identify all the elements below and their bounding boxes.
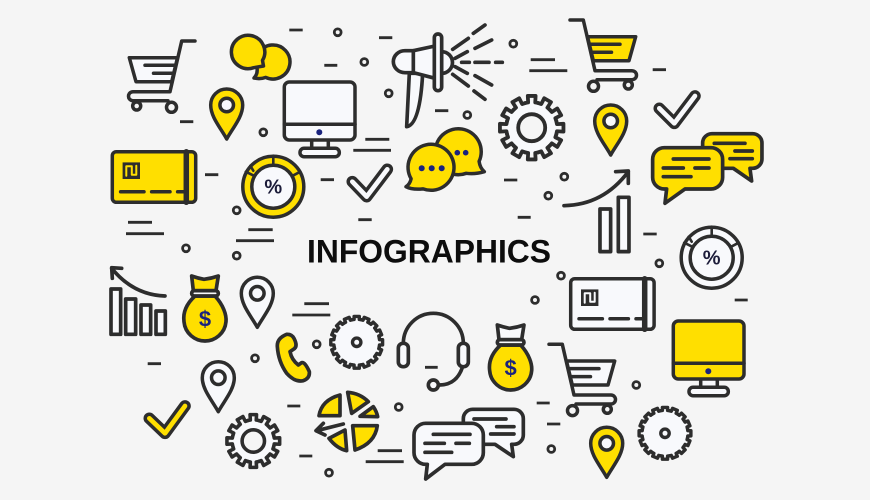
icon: white check mark, top right — [659, 96, 695, 123]
icon: shopping cart with yellow basket, top right — [570, 20, 636, 91]
icon: yellow location pin, top right — [595, 105, 627, 155]
icon: yellow money bag — [184, 276, 226, 341]
icon: yellow telephone handset — [277, 334, 309, 381]
icon: shopping cart, top left — [128, 41, 195, 112]
dollar sign: $ — [505, 356, 517, 381]
icon: yellow round chat bubbles with dots — [406, 129, 484, 190]
icon: yellow location pin, top left — [211, 89, 243, 139]
percent label: % — [264, 176, 282, 198]
icon: white shopping cart, lower right — [549, 344, 616, 416]
icon: yellow round speech bubbles, top left — [231, 35, 290, 79]
decorative dashes — [126, 30, 748, 462]
icon: white check mark — [352, 169, 387, 197]
icon: white desktop monitor — [284, 82, 355, 157]
icon: yellow desktop monitor — [673, 321, 744, 396]
icon: yellow rectangular chat bubbles — [653, 134, 762, 203]
icon: white credit card — [571, 279, 654, 329]
icon: rising arrow over bar chart — [564, 171, 629, 252]
icon: yellow location pin, bottom — [591, 427, 623, 477]
icon: white rectangular chat bubbles — [414, 409, 523, 479]
icon: yellow credit card — [112, 152, 196, 202]
dollar sign: $ — [199, 307, 211, 332]
decorative ring dots — [183, 29, 663, 476]
icon: white location pin, centre left — [241, 277, 273, 327]
icon: megaphone with sound rays — [393, 25, 502, 127]
icon: money bag with white top — [489, 325, 532, 390]
icon: headset with microphone — [398, 313, 468, 390]
icon: saw-tooth gear, lower right — [639, 407, 691, 459]
icon: yellow percent donut — [243, 156, 304, 217]
percent label: % — [703, 248, 721, 270]
icon: falling arrow over bar chart — [111, 268, 165, 334]
icon: small gear, lower left — [227, 415, 280, 467]
icon: white percent donut — [681, 227, 742, 288]
icon: large gear — [500, 96, 563, 159]
icon: pie chart with arrow — [316, 392, 378, 451]
icon: yellow check mark — [149, 406, 185, 433]
title: INFOGRAPHICS — [307, 234, 551, 270]
icon: saw-tooth gear, centre — [331, 316, 383, 368]
icon: white location pin, lower left — [202, 362, 234, 412]
